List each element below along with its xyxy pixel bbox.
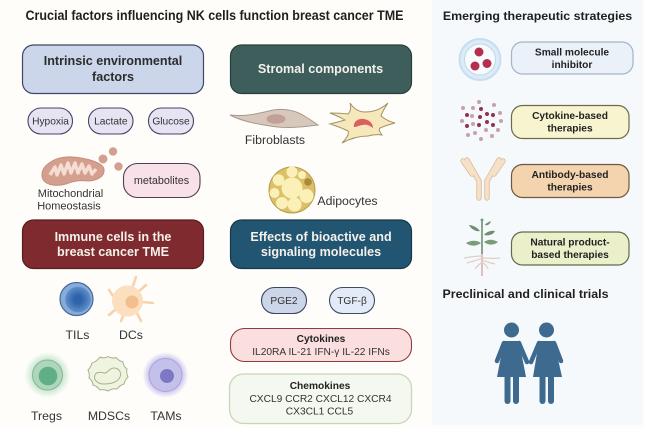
box: antibody-based therapies	[512, 164, 629, 198]
label: homeostasis: Homeostasis	[37, 200, 101, 212]
pill: TGF-beta	[330, 288, 374, 314]
heading: preclinical and clinical trials: Preclinical and clinical trials	[443, 287, 609, 301]
label: TAMs: TAMs	[150, 409, 182, 423]
box: cytokine-based therapies	[512, 106, 629, 138]
box: cytokines: IL20RA IL-21 IFN-γ IL-22 IFNs	[252, 347, 390, 358]
panel: intrinsic environmental factors	[22, 45, 204, 212]
label: Tregs: Tregs	[31, 409, 62, 423]
box: cytokines	[230, 328, 412, 362]
heading: stromal components: Stromal components	[258, 62, 383, 76]
icon: fibroblast	[230, 109, 318, 128]
box: natural product-based therapies: Natural product-	[530, 238, 610, 248]
heading: intrinsic environmental factors: factors	[92, 70, 134, 84]
pill: glucose: Glucose	[152, 116, 190, 128]
heading: effects of bioactive and signaling molecules	[230, 220, 412, 268]
box: small molecule inhibitor: inhibitor	[552, 60, 592, 71]
panel: immune cells	[22, 220, 204, 423]
label: adipocytes: Adipocytes	[317, 194, 378, 208]
label: MDSCs: MDSCs	[88, 409, 130, 423]
icon: TAM cell	[142, 352, 188, 398]
box: small molecule inhibitor: Small molecule	[535, 48, 609, 58]
icon: stromal cell	[330, 103, 395, 143]
title: Crucial factors influencing NK cells function breast cancer TME	[26, 8, 404, 23]
icon: fibroblast nucleus	[266, 114, 286, 124]
panel: bioactive and signaling molecules	[230, 220, 412, 424]
box: cytokines: Cytokines	[297, 334, 346, 345]
label: fibroblasts: Fibroblasts	[245, 133, 305, 147]
icon: cytokine dots	[460, 100, 503, 141]
pill: lactate: Lactate	[94, 116, 128, 128]
box: chemokines: CX3CL1 CCL5	[286, 406, 354, 418]
box: chemokines: Chemokines	[290, 381, 351, 392]
label: TILs: TILs	[66, 328, 89, 342]
heading: effects of bioactive and signaling molecules: Effects of bioactive and	[250, 230, 392, 244]
icon: mitochondrion	[42, 147, 123, 185]
panel: therapeutic strategies background	[432, 0, 643, 425]
box: small molecule inhibitor	[512, 42, 633, 74]
heading: immune cells	[22, 220, 204, 268]
icon: adipocyte	[269, 166, 315, 213]
icon: antibody	[463, 160, 503, 198]
icon: two women figures	[497, 322, 562, 404]
label: DCs: DCs	[119, 328, 143, 342]
pill: glucose	[148, 108, 194, 134]
box: chemokines: CXCL9 CCR2 CXCL12 CXCR4	[249, 394, 392, 405]
pill: hypoxia: Hypoxia	[32, 116, 69, 128]
heading: stromal components	[230, 45, 412, 94]
label: mitochondrial: Mitochondrial	[38, 188, 103, 200]
panel: stromal components	[230, 45, 412, 213]
heading: immune cells: Immune cells in the	[55, 230, 171, 244]
icon: TIL cell	[60, 282, 93, 316]
icon: MDSC cell	[88, 356, 128, 391]
box: chemokines	[230, 374, 412, 424]
pill: metabolites: metabolites	[134, 175, 190, 187]
box: antibody-based therapies: Antibody-based	[532, 170, 608, 181]
pill: PGE2	[262, 288, 306, 314]
box: natural product-based therapies	[512, 232, 629, 265]
heading: immune cells: breast cancer TME	[57, 245, 169, 259]
icon: Treg cell	[24, 352, 70, 398]
heading: intrinsic environmental factors: Intrinsic environmental	[44, 54, 182, 68]
heading: emerging therapeutic strategies: Emerging therapeutic strategies	[443, 9, 632, 23]
icon: plant	[464, 218, 500, 276]
heading: intrinsic environmental factors	[22, 45, 204, 94]
box: cytokine-based therapies: therapies	[547, 124, 593, 134]
pill: hypoxia	[28, 108, 72, 134]
heading: effects of bioactive and signaling molecules: signaling molecules	[261, 245, 381, 259]
pill: lactate	[88, 108, 133, 134]
box: natural product-based therapies: based therapies	[531, 250, 609, 261]
icon: dendritic cell	[109, 277, 153, 321]
box: cytokine-based therapies: Cytokine-based	[532, 111, 608, 122]
pill: metabolites	[124, 164, 200, 198]
pill: TGF-beta: TGF-β	[337, 296, 367, 307]
box: antibody-based therapies: therapies	[547, 182, 593, 194]
pill: PGE2: PGE2	[270, 296, 298, 307]
icon: small molecule vesicle	[460, 39, 500, 80]
